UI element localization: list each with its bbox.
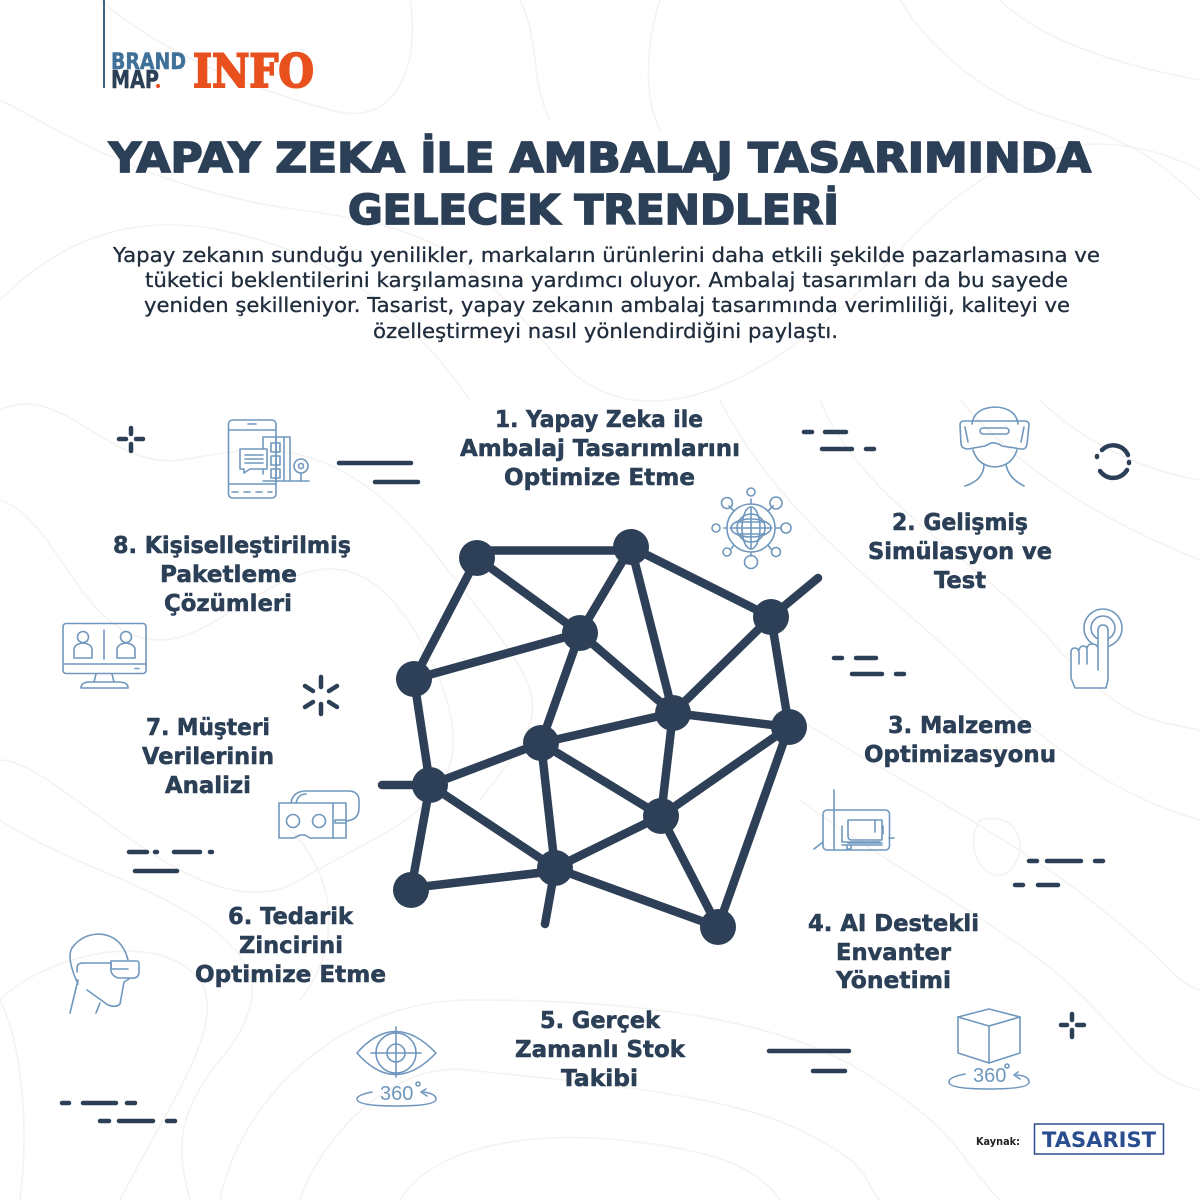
logo: BrandMap Info: MAP [111, 65, 159, 94]
icon: VR cardboard [279, 791, 359, 838]
decorative asterisk [305, 677, 337, 714]
intro text block: tüketici beklentilerini karşılamasına yardımcı oluyor. Ambalaj tasarımları da bu sayede [145, 268, 1068, 292]
heading 5: Zamanlı Stok [515, 1037, 686, 1063]
dashes: left lower [129, 852, 212, 871]
dashes: bottom middle [769, 1051, 849, 1071]
heading 1: 1. Yapay Zeka ile [495, 407, 703, 433]
heading 2 [868, 510, 1052, 594]
heading 4 [808, 911, 979, 994]
dashes: bottom left [62, 1103, 175, 1121]
title: YAPAY ZEKA İLE AMBALAJ TASARIMINDA [108, 134, 1091, 182]
heading 1 [460, 407, 740, 491]
decorative plus: top left [119, 428, 143, 451]
title [108, 134, 1091, 234]
intro text block: Yapay zekanın sunduğu yenilikler, markaların ürünlerini daha etkili şekilde pazarlamasına ve [112, 243, 1100, 267]
heading 7: Verilerinin [142, 744, 274, 770]
icon: cube 360 [949, 1009, 1029, 1089]
icon: eye 360: 360 [380, 1083, 413, 1105]
intro text block [112, 243, 1100, 343]
heading 8: Paketleme [160, 562, 297, 588]
heading 4: Envanter [836, 940, 952, 966]
icon: phone with chat and building [228, 420, 309, 498]
dashes: top right [804, 432, 874, 449]
heading 5 [515, 1008, 686, 1092]
source: Tasarist: Kaynak: [976, 1135, 1020, 1148]
decorative broken circle [1097, 445, 1129, 478]
heading 8: 8. Kişiselleştirilmiş [113, 533, 351, 559]
heading 1: Ambalaj Tasarımlarını [460, 436, 740, 462]
heading 7: 7. Müşteri [146, 715, 270, 741]
icon: video call monitor [63, 624, 146, 688]
intro text block: özelleştirmeyi nasıl yönlendirdiğini paylaştı. [373, 319, 838, 343]
heading 5: 5. Gerçek [540, 1008, 661, 1034]
icon: touch hand [1071, 609, 1122, 688]
heading 7 [142, 715, 274, 799]
heading 1: Optimize Etme [504, 465, 695, 491]
decorative plus: bottom right [1061, 1014, 1084, 1037]
intro text block: yeniden şekilleniyor. Tasarist, yapay zekanın ambalaj tasarımında verimliliği, kaliteyi ve [144, 293, 1070, 317]
heading 4: 4. AI Destekli [808, 911, 979, 937]
icon: VR glasses head profile [70, 934, 139, 1013]
icon: eye 360 [357, 1027, 436, 1106]
dashes: right lower [1015, 861, 1103, 885]
logo: BrandMap Info: INFO [193, 44, 314, 98]
title: GELECEK TRENDLERİ [348, 186, 839, 234]
source: Tasarist: TASARIST [1042, 1128, 1157, 1152]
icon: VR headset head front [960, 407, 1029, 486]
dashes: top left [339, 463, 418, 482]
source: Tasarist [976, 1124, 1164, 1154]
heading 6: Zincirini [239, 933, 343, 959]
icon: phone and forklift device [814, 790, 894, 850]
dashes: right middle [834, 658, 904, 674]
heading 2: 2. Gelişmiş [892, 510, 1028, 536]
heading 6 [195, 904, 386, 988]
heading 2: Simülasyon ve [868, 539, 1052, 565]
network diagram [382, 529, 818, 945]
heading 6: Optimize Etme [195, 962, 386, 988]
heading 3 [864, 713, 1056, 768]
heading 6: 6. Tedarik [228, 904, 354, 930]
heading 8: Çözümleri [164, 591, 292, 617]
heading 8 [113, 533, 351, 617]
icon: globe network [712, 488, 791, 568]
heading 7: Analizi [165, 773, 251, 799]
icon: cube 360: 360 [973, 1065, 1006, 1087]
heading 3: 3. Malzeme [888, 713, 1032, 739]
heading 4: Yönetimi [835, 968, 951, 994]
logo: BrandMap Info: BRAND [111, 50, 186, 75]
heading 5: Takibi [561, 1066, 638, 1092]
logo: BrandMap Info [104, 0, 314, 98]
heading 3: Optimizasyonu [864, 742, 1056, 768]
heading 2: Test [934, 568, 986, 594]
